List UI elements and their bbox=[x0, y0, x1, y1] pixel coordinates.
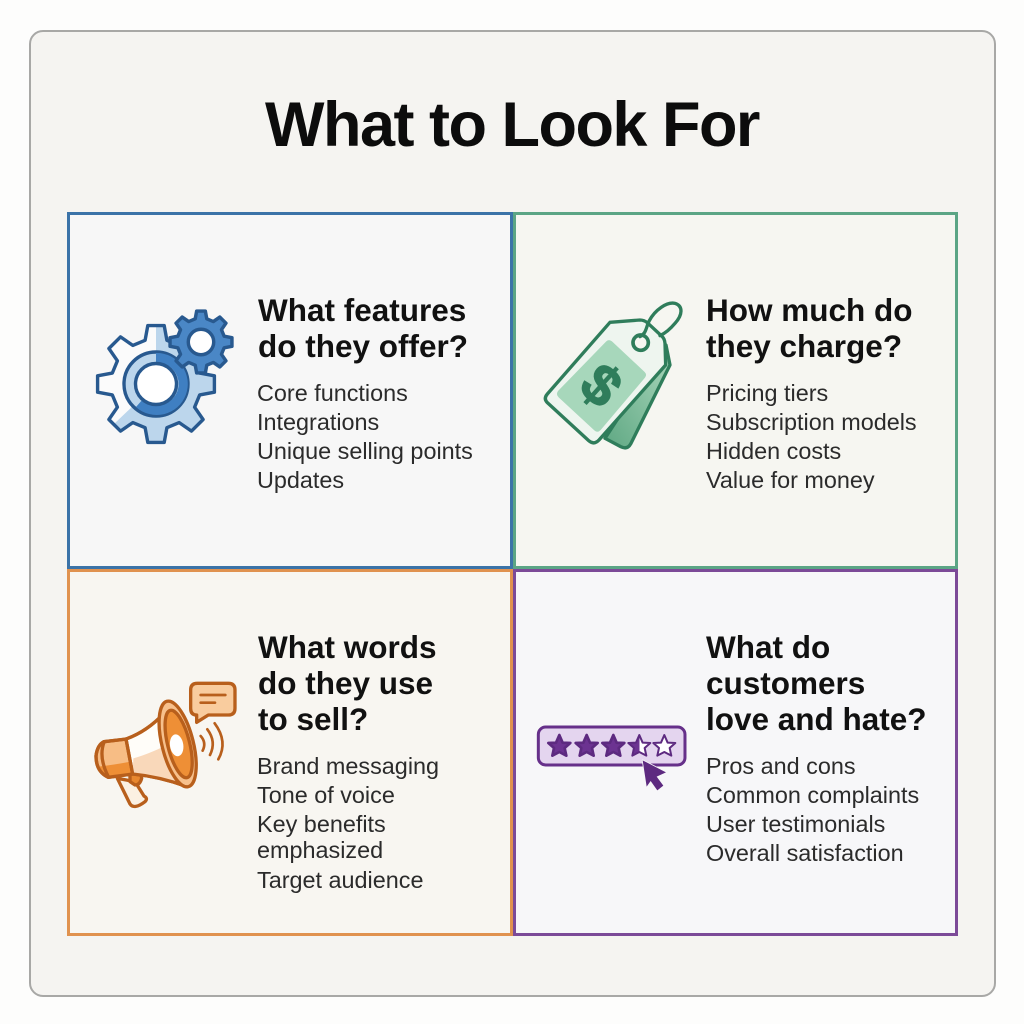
list: reviews: User testimonials bbox=[706, 811, 885, 837]
heading: reviews: customers bbox=[706, 665, 865, 701]
list: messaging: Tone of voice bbox=[257, 782, 395, 808]
list: pricing: Hidden costs bbox=[706, 438, 841, 464]
list: pricing: Value for money bbox=[706, 467, 875, 493]
icon: gears bbox=[96, 309, 234, 444]
heading: reviews: What do bbox=[706, 629, 830, 665]
list: features: Integrations bbox=[257, 409, 379, 435]
list: features bbox=[257, 380, 473, 493]
panel: pricing bbox=[513, 212, 958, 569]
list: reviews: Common complaints bbox=[706, 782, 919, 808]
heading: reviews: love and hate? bbox=[706, 701, 927, 737]
list: pricing: Subscription models bbox=[706, 409, 917, 435]
icon: price tag bbox=[544, 301, 683, 450]
icon: star rating with cursor bbox=[536, 726, 686, 790]
list: messaging: Brand messaging bbox=[257, 753, 439, 779]
icon: price tag: $ bbox=[568, 351, 634, 420]
heading: messaging: to sell? bbox=[258, 701, 368, 737]
heading: messaging: do they use bbox=[258, 665, 433, 701]
list: reviews bbox=[706, 753, 919, 866]
list: features: Unique selling points bbox=[257, 438, 473, 464]
list: reviews: Pros and cons bbox=[706, 753, 856, 779]
icon: megaphone bbox=[94, 682, 237, 808]
list: messaging: emphasized bbox=[257, 837, 383, 863]
heading: pricing: they charge? bbox=[706, 328, 902, 364]
heading: messaging: What words bbox=[258, 629, 436, 665]
heading: features: do they offer? bbox=[258, 328, 468, 364]
panel: messaging bbox=[67, 569, 513, 936]
list: features: Core functions bbox=[257, 380, 408, 406]
panel: reviews bbox=[513, 569, 958, 936]
list: messaging: Key benefits bbox=[257, 811, 386, 837]
title: What to Look For bbox=[265, 90, 759, 160]
panel: features bbox=[67, 212, 513, 569]
heading: reviews bbox=[706, 629, 927, 737]
list: pricing: Pricing tiers bbox=[706, 380, 828, 406]
heading: messaging bbox=[258, 629, 436, 737]
list: features: Updates bbox=[257, 467, 344, 493]
list: messaging bbox=[257, 753, 439, 893]
heading: features: What features bbox=[258, 292, 466, 328]
heading: features bbox=[258, 292, 468, 364]
heading: pricing: How much do bbox=[706, 292, 912, 328]
heading: pricing bbox=[706, 292, 912, 364]
list: pricing bbox=[706, 380, 917, 493]
list: reviews: Overall satisfaction bbox=[706, 840, 904, 866]
list: messaging: Target audience bbox=[257, 867, 423, 893]
